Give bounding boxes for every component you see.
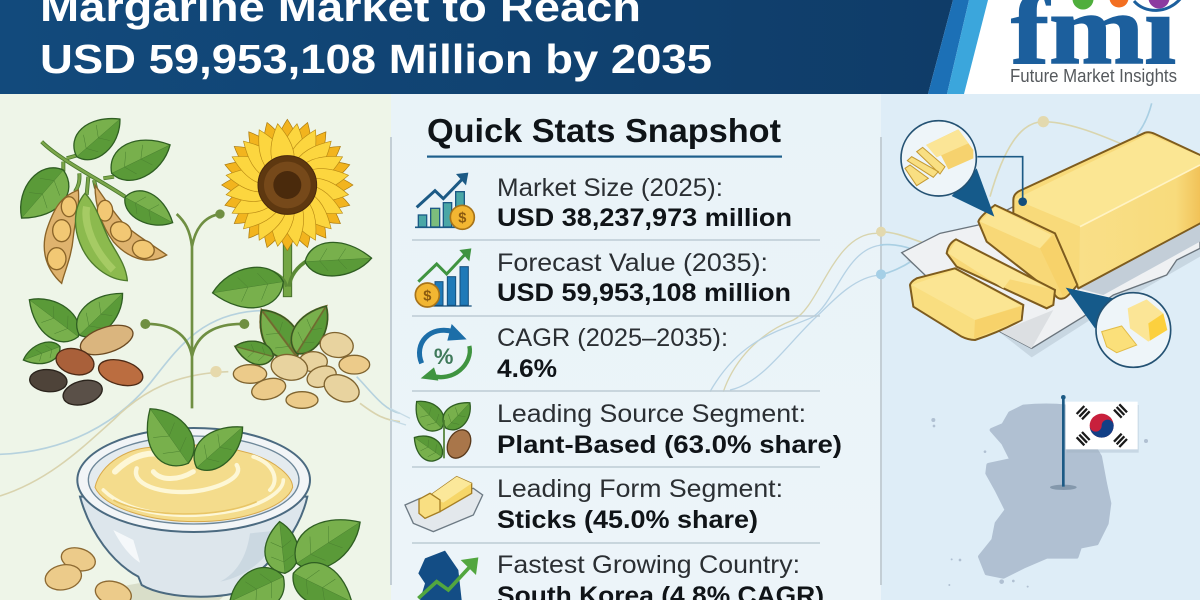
panel: left background	[0, 94, 391, 600]
icons column	[405, 173, 483, 600]
margarine slice 3	[910, 268, 1023, 340]
heading: Quick Stats Snapshot	[427, 112, 781, 149]
panel: right background	[881, 94, 1200, 600]
stat: market size: Market Size (2025):	[497, 174, 723, 202]
stat: CAGR: CAGR (2025–2035):	[497, 324, 728, 352]
icon: CAGR cycle: %	[434, 344, 453, 369]
callout: butter slices	[901, 121, 1027, 217]
callout: butter cubes	[1066, 288, 1171, 367]
stat: market size	[497, 174, 792, 232]
title	[40, 0, 712, 82]
stat: CAGR	[497, 324, 728, 383]
panel: quick stats	[390, 112, 883, 600]
illustration: plant sources	[0, 119, 400, 600]
title: USD 59,953,108 Million by 2035	[40, 36, 712, 82]
illustration: margarine sticks on paper	[901, 121, 1200, 367]
stat: fastest growing country: Fastest Growing Country:	[497, 551, 800, 579]
header banner	[0, 0, 1200, 94]
stat: forecast value: USD 59,953,108 million	[497, 279, 791, 307]
stat: leading source segment	[497, 400, 842, 459]
stat: leading source segment: Plant-Based (63.0% share)	[497, 431, 842, 459]
stat: leading form segment: Leading Form Segment:	[497, 475, 783, 503]
stat: forecast value: Forecast Value (2035):	[497, 249, 768, 277]
icon: basil sprig	[222, 503, 371, 600]
icon: market size chart: $	[458, 211, 466, 227]
icon: soybean branch	[8, 106, 180, 283]
icon: country growth	[418, 551, 478, 600]
icon: nuts and seeds	[19, 281, 146, 409]
stat: market size: USD 38,237,973 million	[497, 204, 792, 232]
icon: forecast chart	[415, 248, 472, 307]
icon: margarine bowl	[77, 397, 310, 597]
icon: butter stick in tray	[405, 477, 483, 532]
icon: pile of seeds	[232, 298, 370, 408]
stat: CAGR: 4.6%	[497, 355, 557, 383]
icon: South Korean flag	[1050, 395, 1139, 490]
stat: fastest growing country	[497, 551, 824, 600]
margarine slice 2	[947, 239, 1055, 308]
map: South Korea	[931, 405, 1148, 588]
icon: CAGR cycle	[419, 324, 470, 381]
stat: leading source segment: Leading Source Segment:	[497, 400, 806, 428]
decorative lines behind stats	[390, 233, 883, 425]
stat: leading form segment	[497, 475, 783, 534]
stat: leading form segment: Sticks (45.0% share)	[497, 506, 758, 534]
panel: South Korea map and connector lines	[876, 103, 1152, 588]
icon: plant and seed	[407, 394, 478, 466]
panel: center background	[391, 94, 881, 600]
icon: sunflower	[210, 119, 372, 314]
icon: market size chart	[415, 173, 474, 229]
margarine block	[1013, 132, 1200, 288]
icon: central sprout	[140, 209, 249, 408]
logo: FMI: Future Market Insights	[1010, 66, 1177, 86]
margarine slice 1	[978, 205, 1077, 299]
icon: loose beans	[43, 544, 223, 600]
icon: forecast chart: $	[423, 288, 431, 304]
stat: forecast value	[497, 249, 791, 307]
